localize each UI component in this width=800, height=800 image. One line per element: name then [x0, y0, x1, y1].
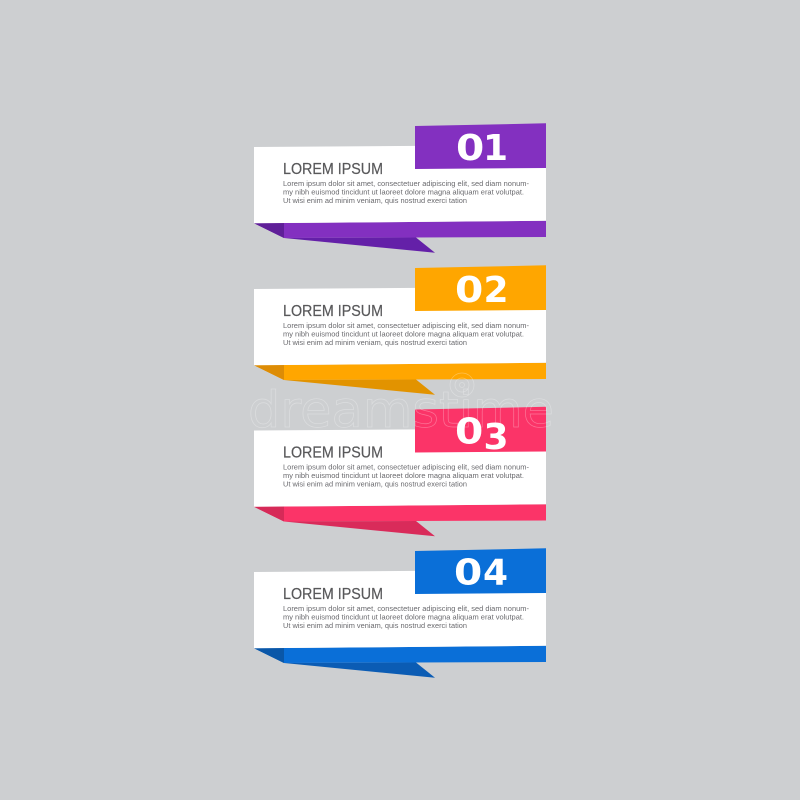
body text: step 01: Ut wisi enim ad minim veniam, quis nostrud exerci tation: [283, 196, 467, 205]
heading: step 02: LOREM IPSUM: [283, 303, 383, 320]
number tab: 02: 0: [455, 269, 483, 311]
number tab: 01: 1: [483, 128, 508, 169]
watermark: dreamstime: [248, 381, 554, 439]
body text: step 02: Ut wisi enim ad minim veniam, quis nostrud exerci tation: [283, 338, 467, 347]
number tab: 04: 0: [454, 552, 482, 594]
number tab: 03: 0: [455, 411, 483, 453]
body text: step 03: Lorem ipsum dolor sit amet, consectetuer adipiscing elit, sed diam nonum-: [283, 462, 529, 472]
white card: step 03: [254, 428, 546, 507]
heading: step 04: LOREM IPSUM: [283, 586, 383, 603]
number tab: 02: 2: [484, 270, 509, 311]
body text: step 01: my nibh euismod tincidunt ut laoreet dolore magna aliquam erat volutpat.: [283, 188, 524, 196]
body text: step 02: [283, 321, 529, 347]
panel: step 04: [254, 548, 546, 678]
body text: step 03: [283, 462, 529, 488]
number tab: 01: 0: [456, 127, 484, 169]
number tab: 02: [415, 265, 546, 311]
number tab: 04: [415, 548, 546, 594]
number tab: 03: [415, 407, 546, 458]
body text: step 04: Lorem ipsum dolor sit amet, consectetuer adipiscing elit, sed diam nonum-: [283, 604, 529, 613]
ribbon: step 03: [254, 504, 546, 536]
white card: step 04: [254, 570, 546, 648]
ribbon: step 01: [254, 221, 546, 253]
white card: step 01: [254, 145, 546, 223]
body text: step 01: Lorem ipsum dolor sit amet, consectetuer adipiscing elit, sed diam nonum-: [283, 179, 529, 188]
body text: step 02: Lorem ipsum dolor sit amet, consectetuer adipiscing elit, sed diam nonum-: [283, 321, 529, 330]
panel: step 02: [254, 265, 546, 395]
number tab: 03: 3: [484, 417, 509, 458]
heading: step 01: LOREM IPSUM: [283, 161, 383, 178]
body text: step 04: Ut wisi enim ad minim veniam, quis nostrud exerci tation: [283, 621, 467, 630]
ribbon: step 02: [254, 363, 546, 395]
body text: step 03: Ut wisi enim ad minim veniam, quis nostrud exerci tation: [283, 480, 467, 488]
white card: step 02: [254, 287, 546, 365]
panel: step 03: [254, 407, 546, 536]
body text: step 02: my nibh euismod tincidunt ut laoreet dolore magna aliquam erat volutpat.: [283, 330, 524, 338]
body text: step 03: my nibh euismod tincidunt ut laoreet dolore magna aliquam erat volutpat.: [283, 471, 524, 480]
heading: step 03: LOREM IPSUM: [283, 444, 383, 462]
body text: step 01: [283, 179, 529, 205]
ribbon: step 04: [254, 646, 546, 678]
number tab: 01: [415, 123, 546, 169]
panel: step 01: [254, 123, 546, 253]
number tab: 04: 4: [483, 552, 508, 594]
body text: step 04: [283, 604, 529, 630]
body text: step 04: my nibh euismod tincidunt ut laoreet dolore magna aliquam erat volutpat.: [283, 612, 524, 622]
